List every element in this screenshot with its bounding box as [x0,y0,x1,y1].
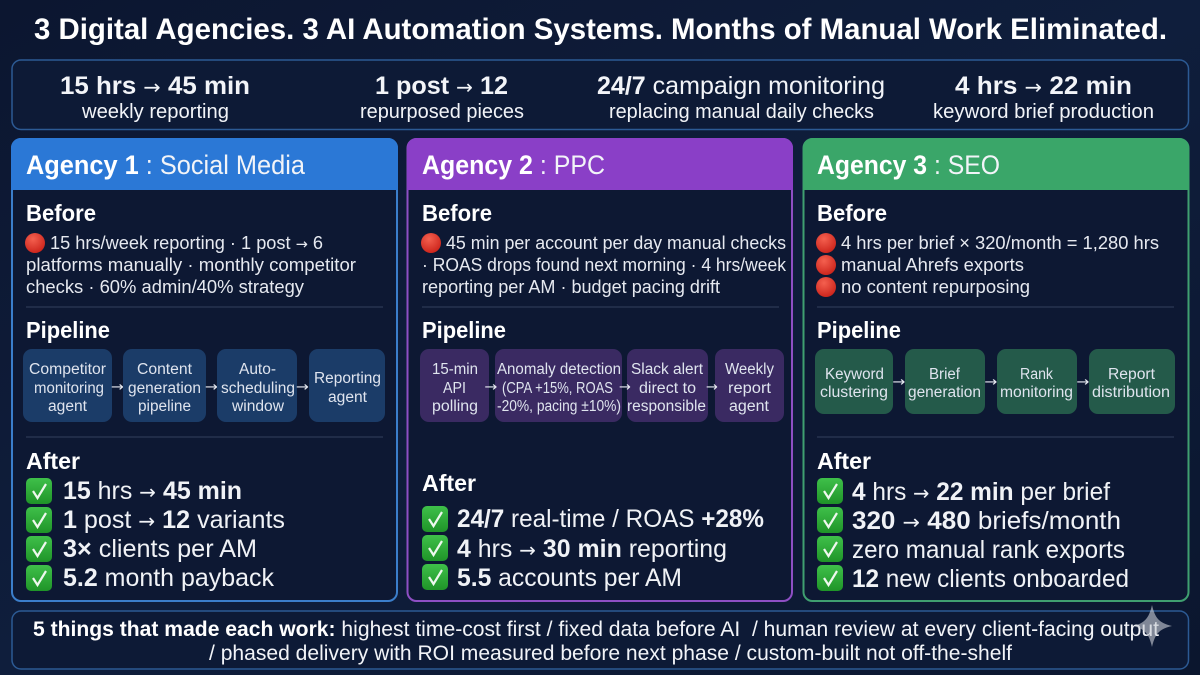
header: agency 3: Agency 3 : SEO [817,150,1000,180]
step: content generation: generation [128,380,201,397]
step: api polling [420,349,489,422]
panel: agency 2 ppc [407,138,793,601]
pipeline steps [420,349,784,422]
stat: keyword briefs [933,72,1154,123]
stat: weekly reporting [60,72,250,123]
step: auto-scheduling [217,349,297,422]
step: slack alert: direct to [639,380,696,397]
step: report distribution: distribution [1092,384,1170,401]
step: anomaly detection: -20%, pacing ±10%) [497,398,621,415]
step: auto-scheduling: Auto- [239,361,276,378]
before heading: Before [422,200,492,226]
pipeline heading: Pipeline [26,317,110,343]
stat: keyword briefs: 4 hrs → 22 min [955,72,1132,100]
step: report distribution [1089,349,1175,414]
step: content generation: Content [137,361,193,378]
before text: checks · 60% admin/40% strategy [26,276,305,297]
step: reporting agent: agent [328,389,368,406]
arrow: → [296,380,309,395]
step: api polling: 15-min [432,361,478,378]
step: reporting agent [309,349,385,422]
after results: 3× clients per AM [63,535,257,563]
before text [816,232,1159,297]
before text: 45 min per account per day manual checks [446,232,786,253]
step: brief generation [905,349,985,414]
before text: 15 hrs/week reporting · 1 post → 6 [50,232,323,253]
step: weekly report [715,349,784,422]
after results: 1 post → 12 variants [63,506,285,534]
step: report distribution: Report [1108,366,1156,383]
step: content generation: pipeline [138,398,191,415]
pipeline steps [23,349,385,422]
step: keyword clustering: clustering [820,384,888,401]
step: brief generation: generation [908,384,981,401]
after heading: After [422,470,476,496]
step: content generation [123,349,206,422]
arrow: → [984,375,998,390]
step: keyword clustering: Keyword [825,366,884,383]
title: 3 Digital Agencies. 3 AI Automation Systems. Months of Manual Work Eliminated. [34,13,1167,46]
after results: 320 → 480 briefs/month [852,507,1121,535]
step: api polling: API [443,380,466,397]
arrow: → [1076,375,1090,390]
before text [25,232,356,297]
after results: 15 hrs → 45 min [63,477,242,505]
step: rank monitoring [997,349,1077,414]
arrow: → [892,375,906,390]
after results: 4 hrs → 22 min per brief [852,478,1110,506]
step: anomaly detection: (CPA +15%, ROAS [502,380,613,397]
before heading: Before [26,200,96,226]
arrow: → [205,380,218,395]
header: agency 1: Agency 1 : Social Media [26,150,306,180]
before text: 4 hrs per brief × 320/month = 1,280 hrs [841,232,1159,253]
panel: summary stats [12,60,1188,130]
step: reporting agent: Reporting [314,370,381,387]
panel: agency 3 seo [803,138,1189,601]
step: auto-scheduling: scheduling [221,380,295,397]
step: competitor monitoring [23,349,112,422]
step: auto-scheduling: window [231,398,285,415]
after results: zero manual rank exports [852,536,1125,564]
header: agency 2 [407,138,793,190]
before heading: Before [817,200,887,226]
step: competitor monitoring: agent [48,398,88,415]
header: agency 2: Agency 2 : PPC [422,150,605,180]
after results [26,477,285,592]
pipeline steps [815,349,1175,414]
after results: 5.5 accounts per AM [457,564,682,592]
step: competitor monitoring: Competitor [29,361,106,378]
before text: reporting per AM · budget pacing drift [422,276,720,297]
after results: 4 hrs → 30 min reporting [457,535,727,563]
step: weekly report: agent [729,398,770,415]
step: anomaly detection [495,349,622,422]
pipeline heading: Pipeline [817,317,901,343]
icon: sparkle watermark [1133,605,1172,647]
before text: manual Ahrefs exports [841,254,1024,275]
stat: keyword briefs: keyword brief production [933,101,1154,123]
after heading: After [26,448,80,474]
arrow: → [484,380,498,395]
panel: success factors [12,611,1188,669]
after results: 24/7 real-time / ROAS +28% [457,505,764,533]
stat: repurposed pieces: 1 post → 12 [375,72,508,100]
header: agency 1 [11,138,398,190]
step: anomaly detection: Anomaly detection [497,361,621,378]
step: keyword clustering [815,349,893,414]
before text: platforms manually · monthly competitor [26,254,356,275]
after results: 5.2 month payback [63,564,274,592]
step: slack alert: responsible [627,398,706,415]
arrow: → [619,380,631,395]
step: weekly report: report [728,380,772,397]
after results [422,505,764,592]
after heading: After [817,448,871,474]
step: slack alert: Slack alert [631,361,704,378]
stat: campaign monitoring: 24/7 campaign monitoring [597,72,885,100]
stat: repurposed pieces [360,72,524,123]
panel: agency 1 social media [11,138,398,601]
step: rank monitoring: monitoring [1000,384,1073,401]
stat: repurposed pieces: repurposed pieces [360,101,524,123]
step: api polling: polling [432,398,478,415]
stat: campaign monitoring [597,72,885,123]
before text: no content repurposing [841,276,1030,297]
step: weekly report: Weekly [725,361,774,378]
after results [817,478,1129,593]
step: slack alert [627,349,708,422]
step: brief generation: Brief [929,366,961,383]
stat: weekly reporting: weekly reporting [81,101,229,123]
pipeline heading: Pipeline [422,317,506,343]
step: rank monitoring: Rank [1020,366,1053,383]
after results: 12 new clients onboarded [852,565,1129,593]
stat: weekly reporting: 15 hrs → 45 min [60,72,250,100]
step: competitor monitoring: monitoring [34,380,104,397]
before text: · ROAS drops found next morning · 4 hrs/week [422,254,787,275]
factors line 2: / phased delivery with ROI measured before next phase / custom-built not off-the-shelf [209,642,1012,665]
factors line 1: 5 things that made each work: highest time-cost first / fixed data before AI / human review at every client-facing output [33,618,1159,641]
stat: campaign monitoring: replacing manual daily checks [609,101,874,123]
before text [421,232,787,297]
arrow: → [706,380,718,395]
header: agency 3 [803,138,1189,190]
arrow: → [111,380,124,395]
